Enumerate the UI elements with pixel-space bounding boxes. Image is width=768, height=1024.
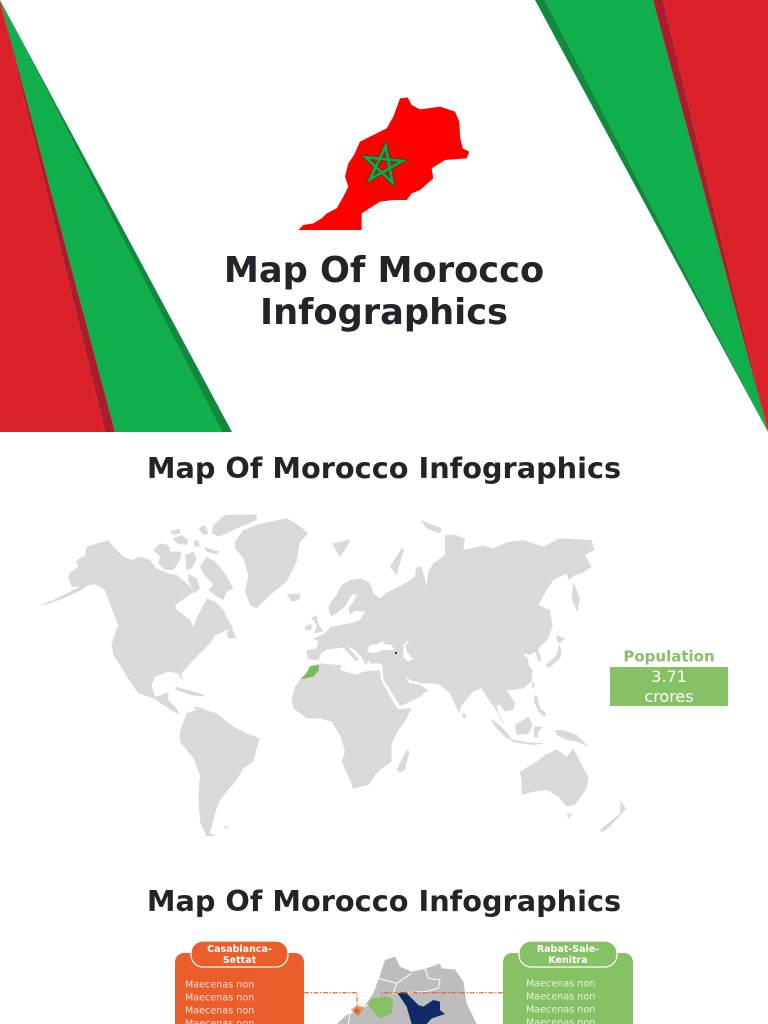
pill: Rabat-Sale-Kenitra label [519, 941, 617, 967]
connector: Rabat-Sale-Kenitra [382, 993, 503, 996]
panel: Casablanca-Settat [175, 941, 304, 1024]
text: Rabat-Sale-Kenitra body: Maecenas non [526, 1004, 595, 1016]
decorative corner: right flag wedges [535, 0, 768, 432]
heading: world map section: Map Of Morocco Infographics [147, 451, 621, 485]
icon: Morocco flag map [298, 97, 469, 230]
map: Americas, Greenland and Arctic [40, 514, 308, 837]
callout: population: 3.71 [651, 667, 687, 686]
pill: Casablanca-Settat label: Settat [223, 955, 257, 966]
pill: Rabat-Sale-Kenitra label: Kenitra [548, 955, 588, 966]
callout: population [610, 648, 728, 706]
heading: regions section: Map Of Morocco Infographics [147, 884, 621, 918]
text: Rabat-Sale-Kenitra body: Maecenas non [526, 992, 595, 1002]
title: hero heading: Map Of Morocco [224, 250, 544, 291]
pill: Casablanca-Settat label [191, 941, 288, 967]
world map [40, 514, 626, 837]
text: Rabat-Sale-Kenitra body: Maecenas non [526, 978, 595, 990]
text: Casablanca-Settat body [185, 980, 254, 1024]
text: Casablanca-Settat body: Maecenas non [185, 980, 254, 990]
text: Casablanca-Settat body: Maecenas non [185, 992, 254, 1004]
callout: population: Population [623, 648, 715, 666]
callout: population: crores [644, 687, 694, 706]
pill: Casablanca-Settat label: Casablanca- [207, 944, 272, 955]
map: Eurasia, Africa and Oceania [290, 520, 626, 832]
title: hero heading [224, 250, 544, 333]
connector: Casablanca-Settat [304, 993, 357, 1008]
decorative corner: left flag wedges [0, 0, 232, 432]
panel: Rabat-Sale-Kenitra [503, 941, 633, 1024]
title: hero heading: Infographics [260, 292, 508, 333]
text: Rabat-Sale-Kenitra body [526, 978, 595, 1024]
pill: Rabat-Sale-Kenitra label: Rabat-Sale- [537, 944, 599, 955]
regional map of Morocco [337, 957, 477, 1024]
text: Casablanca-Settat body: Maecenas non [185, 1006, 254, 1016]
